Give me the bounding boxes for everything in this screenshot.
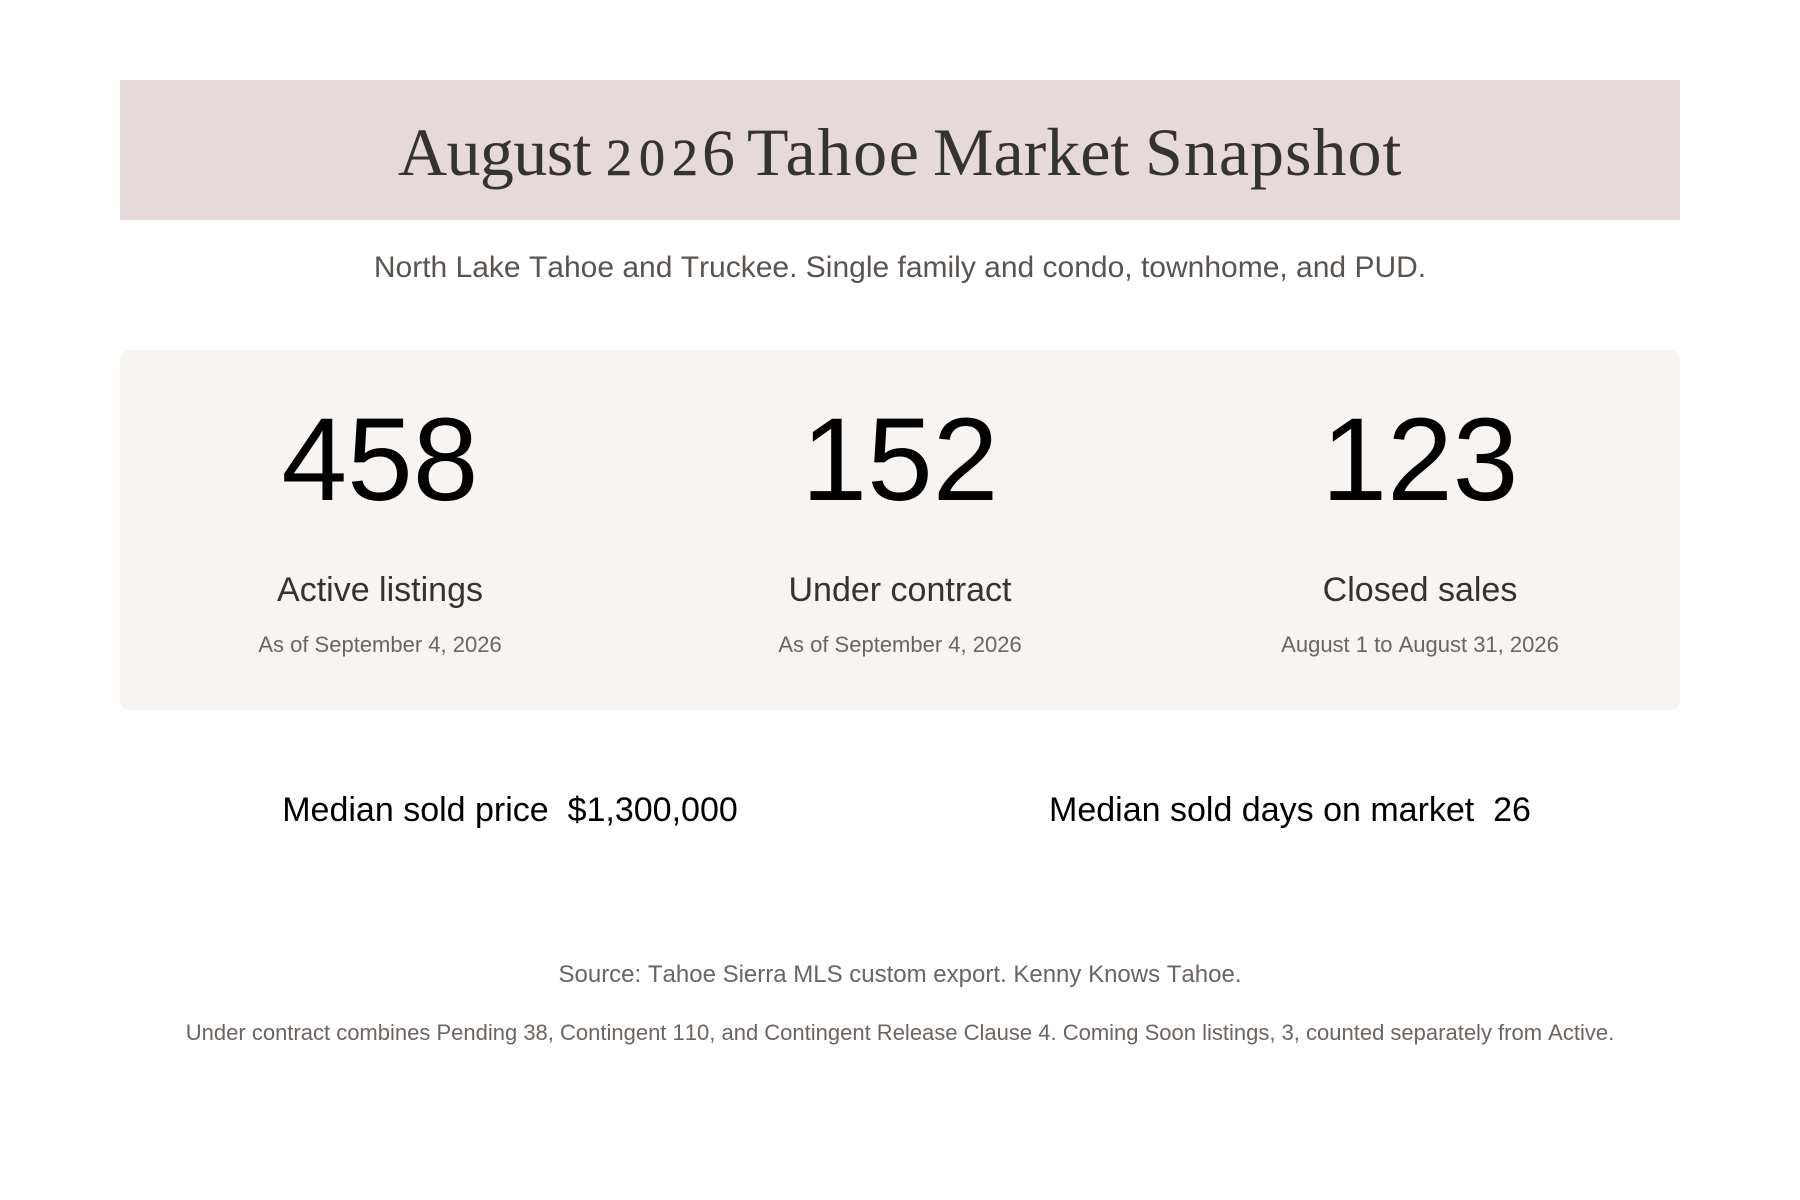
title: Market xyxy=(933,114,1146,190)
stat: closed sales: August 1 to August 31, 2026 xyxy=(1281,632,1559,657)
stat: closed sales xyxy=(1281,394,1559,657)
stat: under contract: Under contract xyxy=(788,571,1012,609)
source line: Source: Tahoe Sierra MLS custom export. Kenny Knows Tahoe. xyxy=(558,961,1242,988)
title: August xyxy=(398,114,607,190)
panel: key stats xyxy=(120,350,1680,710)
metric: median sold days on market: Median sold days on market 26 xyxy=(1049,791,1531,829)
stat: active listings xyxy=(258,394,502,657)
stat: active listings: Active listings xyxy=(277,571,483,609)
title: Snapshot xyxy=(1145,114,1402,190)
stat: under contract: 152 xyxy=(802,394,998,526)
title: Tahoe xyxy=(747,114,939,190)
title: 2 xyxy=(606,130,632,187)
footnote: Under contract combines Pending 38, Contingent 110, and Contingent Release Clause 4. Coming Soon listings, 3, counted separately from Active. xyxy=(186,1020,1614,1045)
subtitle: North Lake Tahoe and Truckee. Single family and condo, townhome, and PUD. xyxy=(374,251,1426,284)
metric: median sold price: Median sold price $1,300,000 xyxy=(282,791,738,829)
stat: active listings: 458 xyxy=(282,394,478,526)
stat: under contract: As of September 4, 2026 xyxy=(778,632,1022,657)
title: 2 xyxy=(672,130,698,187)
stat: active listings: As of September 4, 2026 xyxy=(258,632,502,657)
title: 0 xyxy=(639,130,665,187)
stat: under contract xyxy=(778,394,1022,657)
title: 6 xyxy=(702,117,752,190)
stat: closed sales: Closed sales xyxy=(1323,571,1517,609)
header band xyxy=(120,80,1680,220)
stat: closed sales: 123 xyxy=(1322,394,1518,526)
